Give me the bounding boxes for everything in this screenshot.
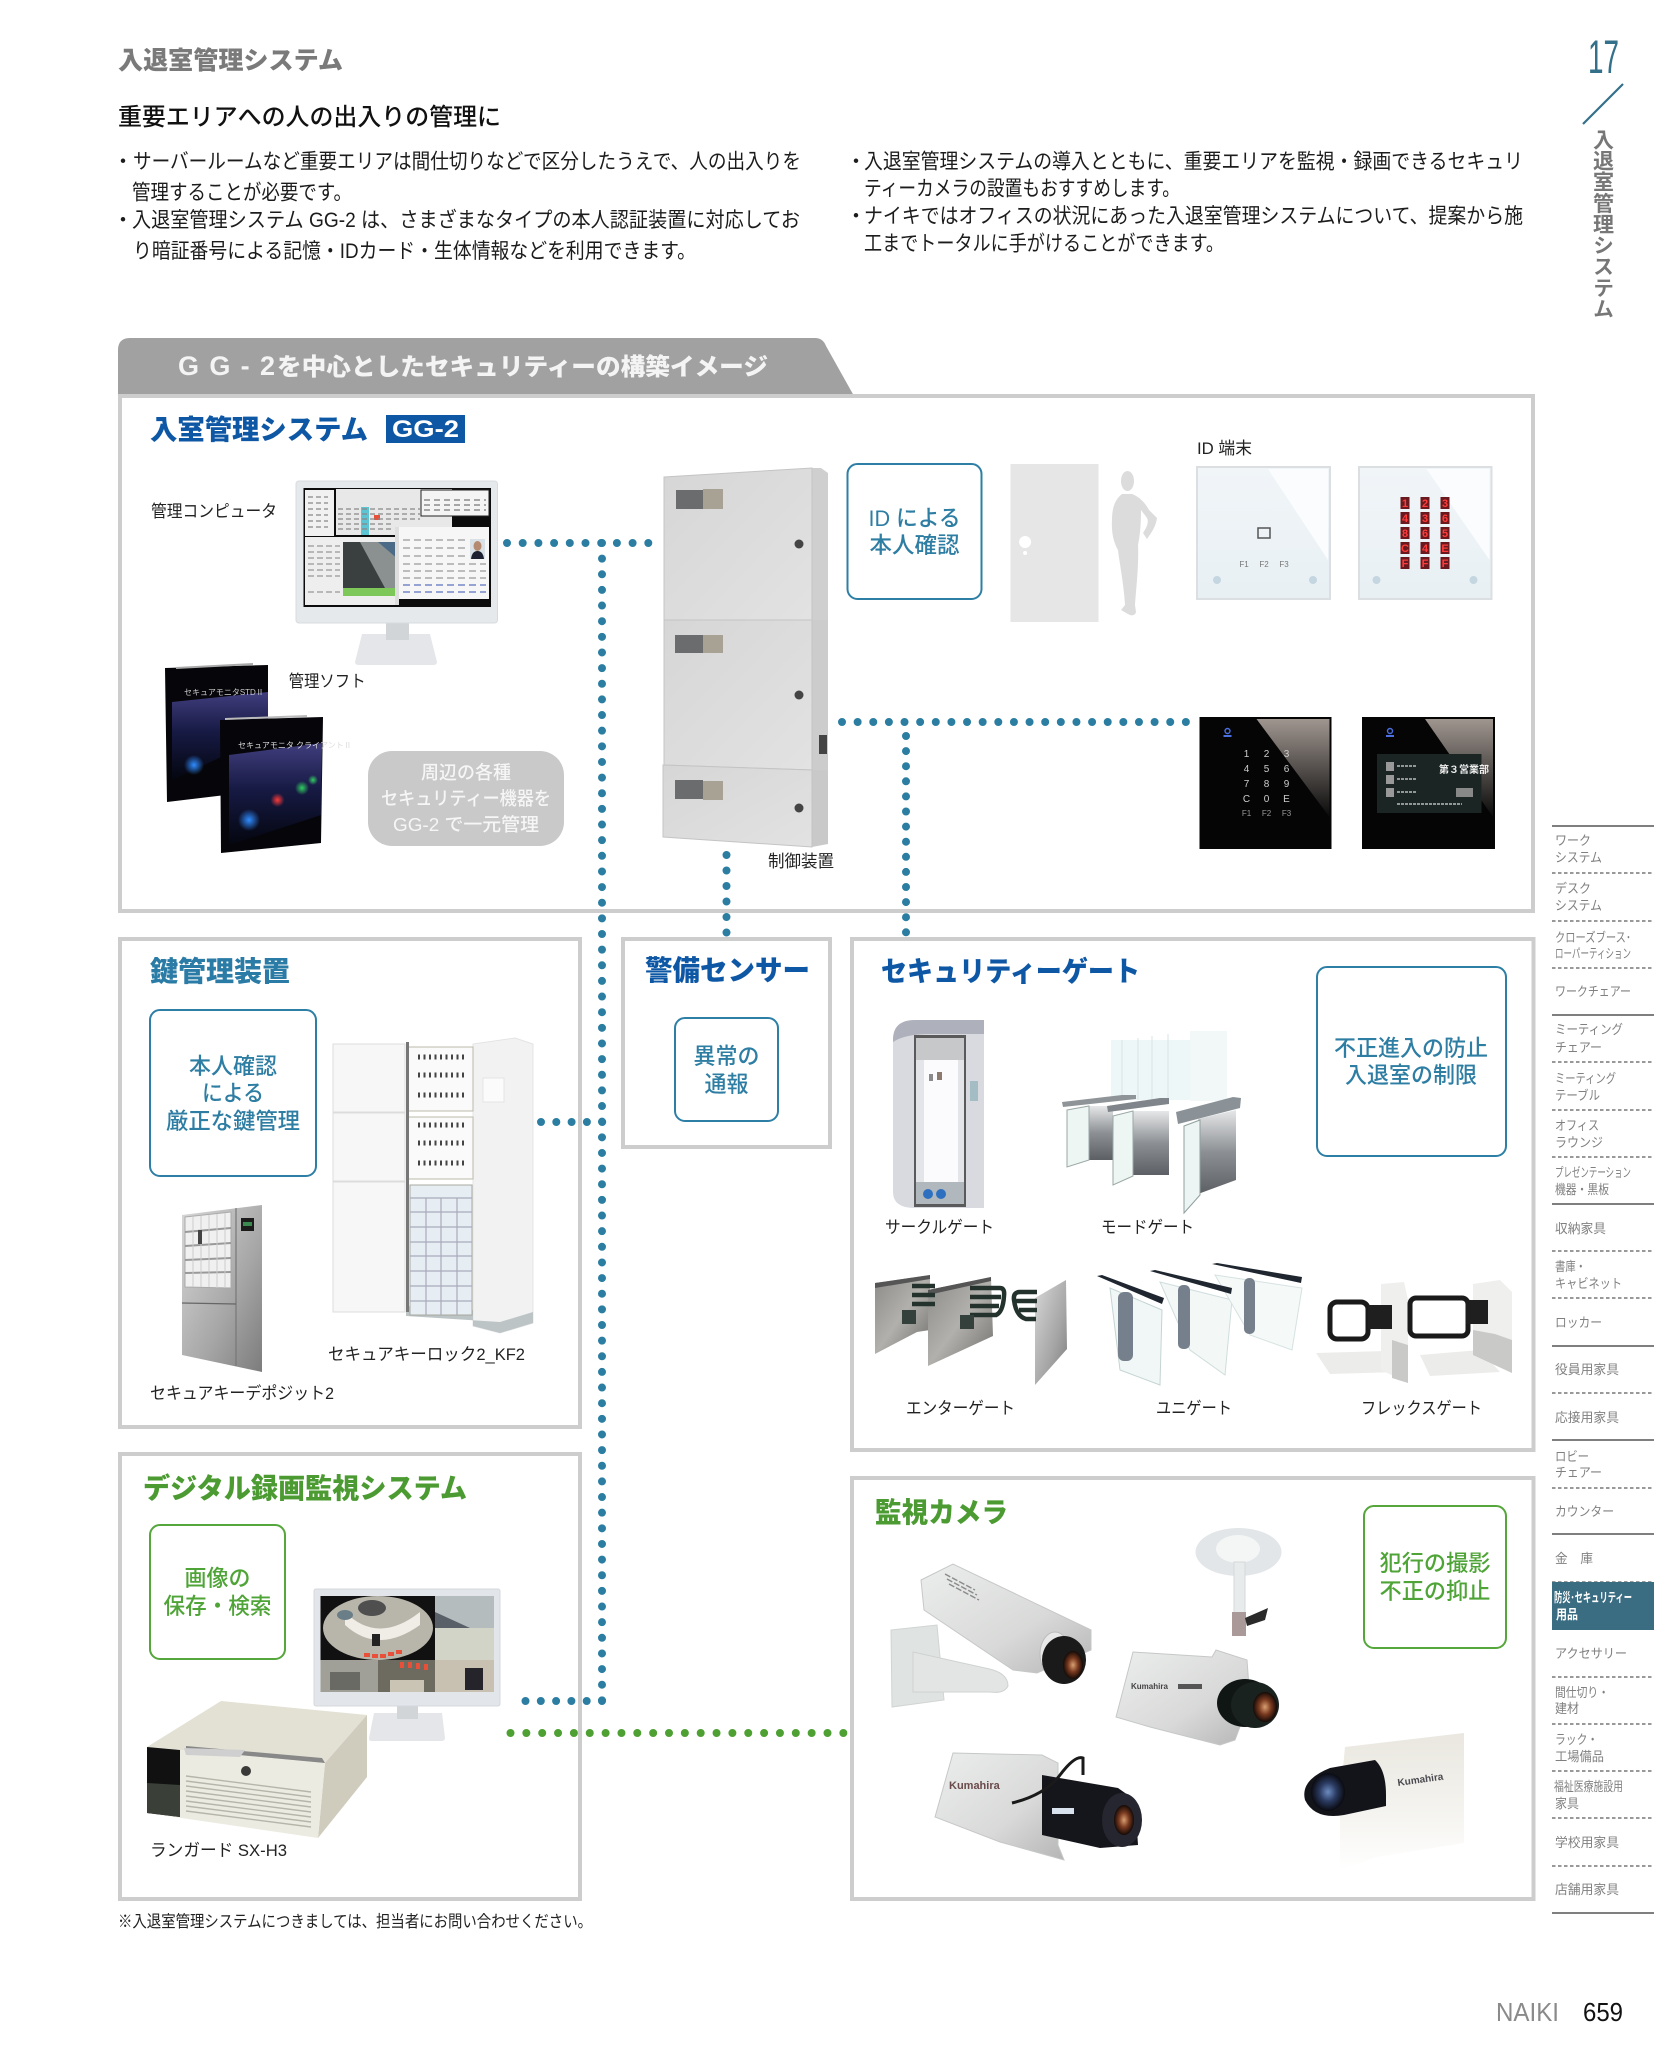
gray callout: unified management: GG-2 で一元管理 — [393, 814, 539, 835]
sidebar index: 金 庫 — [1555, 1551, 1593, 1566]
intro text left column: 入退室管理システム GG-2 は、さまざまなタイプの本人認証装置に対応してお — [132, 208, 800, 232]
sidebar index: ワークチェアー — [1555, 984, 1631, 999]
ID terminal black keypad — [1200, 717, 1332, 849]
intro text left column: 管理することが必要です。 — [132, 182, 352, 204]
ID terminal black keypad: 8 — [1264, 779, 1270, 790]
badge GG-2: GG-2 — [392, 416, 459, 443]
software boxes: セキュアモニタSTDⅡ — [184, 688, 264, 697]
sidebar index: 家具 — [1555, 1796, 1579, 1811]
uni gate — [1097, 1263, 1302, 1385]
heading: 警備センサー — [645, 955, 810, 986]
callout — [675, 1018, 778, 1121]
intro text right column: ・ — [846, 205, 866, 228]
ID terminal black display — [1362, 717, 1495, 849]
ID terminal white keypad: 3 — [1442, 498, 1448, 510]
callout: ID verification — [848, 464, 982, 599]
callout: 入退室の制限 — [1345, 1063, 1477, 1088]
ID terminal white keypad: 3 — [1422, 513, 1428, 525]
ID terminal black keypad: 3 — [1284, 749, 1290, 760]
sidebar index: 書庫・ — [1555, 1259, 1586, 1274]
camera 3: Kumahira — [949, 1780, 1001, 1792]
ID terminal black display: 第３営業部 — [1439, 763, 1489, 776]
heading: 鍵管理装置 — [150, 955, 290, 987]
heading: デジタル録画監視システム — [143, 1472, 467, 1504]
sidebar index: オフィス — [1555, 1118, 1599, 1133]
ID terminal white keypad: 6 — [1422, 528, 1428, 540]
label: サークルゲート — [885, 1218, 994, 1237]
sidebar index: ミーティング — [1555, 1071, 1616, 1086]
ID terminal black keypad: 7 — [1244, 779, 1250, 790]
sidebar index: チェアー — [1555, 1040, 1602, 1055]
camera 2 ceiling mount — [1116, 1528, 1282, 1745]
footnote: ※入退室管理システムにつきましては、担当者にお問い合わせください。 — [118, 1912, 592, 1931]
callout: 通報 — [704, 1072, 748, 1097]
intro text right column: ・ — [846, 150, 866, 174]
sidebar index: ミーティング — [1555, 1022, 1623, 1037]
sidebar index: 役員用家具 — [1555, 1362, 1619, 1377]
subtitle: 重要エリアへの人の出入りの管理に — [118, 104, 501, 131]
callout: 厳正な鍵管理 — [166, 1109, 300, 1134]
sidebar index: 学校用家具 — [1555, 1835, 1619, 1850]
label: フレックスゲート — [1361, 1399, 1482, 1418]
ID terminal white card reader: F2 — [1259, 560, 1269, 569]
panel: entry management system — [120, 396, 1533, 911]
ID terminal white keypad: E — [1441, 543, 1449, 555]
page number: 659 — [1583, 1997, 1623, 2027]
intro text right column: 工までトータルに手がけることができます。 — [864, 232, 1224, 256]
ID terminal white keypad: 6 — [1442, 513, 1448, 525]
circle gate — [893, 1020, 984, 1208]
gray callout: unified management — [368, 751, 564, 846]
key cabinet KF2 — [333, 1038, 533, 1333]
ID terminal white keypad: 2 — [1422, 498, 1428, 510]
connector dots: to security gates — [902, 736, 910, 933]
label: 制御装置 — [768, 852, 834, 871]
callout: 犯行の撮影 — [1380, 1551, 1490, 1576]
sidebar index: システム — [1555, 850, 1602, 865]
heading: セキュリティーゲート — [881, 955, 1140, 987]
callout: による — [202, 1081, 264, 1106]
label: ID 端末 — [1197, 439, 1252, 458]
ID terminal white card reader — [1197, 467, 1330, 599]
enter gate — [875, 1275, 1067, 1385]
intro text right column: ティーカメラの設置もおすすめします。 — [864, 178, 1180, 200]
ID terminal white keypad: F — [1422, 558, 1429, 570]
ID terminal white keypad: 8 — [1402, 528, 1408, 540]
chapter number 17 with slash: 17 — [1588, 30, 1619, 83]
key deposit — [182, 1205, 262, 1372]
camera 4: Kumahira — [1397, 1772, 1445, 1789]
sidebar index: 建材 — [1555, 1701, 1579, 1716]
ID terminal white card reader: F1 — [1239, 560, 1249, 569]
ID terminal white keypad: 1 — [1402, 498, 1408, 510]
sidebar index: アクセサリー — [1555, 1646, 1627, 1661]
sidebar index: 間仕切り・ — [1555, 1685, 1609, 1700]
mode gate — [1062, 1031, 1241, 1213]
gray callout: unified management: 周辺の各種 — [421, 762, 511, 783]
icon: person silhouette — [1112, 471, 1157, 615]
ID terminal black keypad: 5 — [1264, 764, 1270, 775]
connector dots: recorder to cameras — [510, 1729, 844, 1737]
label: エンターゲート — [906, 1399, 1015, 1418]
control unit cabinet — [663, 468, 828, 847]
label: セキュアキーロック2_KF2 — [328, 1345, 525, 1364]
callout — [150, 1525, 285, 1659]
sidebar index: システム — [1555, 898, 1602, 913]
camera 3 — [935, 1753, 1142, 1860]
sidebar index: デスク — [1555, 881, 1591, 896]
sidebar index: チェアー — [1555, 1465, 1602, 1480]
section tab: を中心としたセキュリティーの構築イメージ — [277, 353, 768, 381]
callout: 不正進入の防止 — [1334, 1036, 1488, 1061]
section tab: GG-2 — [178, 351, 275, 381]
callout — [1364, 1506, 1506, 1648]
label: 管理コンピュータ — [151, 502, 277, 521]
ID terminal black keypad: E — [1283, 794, 1290, 805]
ID terminal black keypad: 6 — [1284, 764, 1290, 775]
callout: 本人確認 — [189, 1054, 277, 1079]
intro text left column: サーバールームなど重要エリアは間仕切りなどで区分したうえで、人の出入りを — [133, 150, 801, 174]
camera 2 ceiling mount: Kumahira — [1131, 1682, 1168, 1691]
ID terminal black keypad: 2 — [1264, 749, 1270, 760]
ID terminal black keypad: 4 — [1244, 764, 1250, 775]
connector dots: to sensor — [722, 855, 730, 933]
flex gate — [1316, 1280, 1512, 1383]
sidebar index: キャビネット — [1555, 1276, 1622, 1291]
icon: door — [1010, 464, 1098, 622]
label: モードゲート — [1101, 1218, 1194, 1237]
recorder SX-H3 — [147, 1701, 367, 1838]
callout: ID verification: ID による — [868, 506, 960, 531]
recording monitor — [314, 1589, 500, 1741]
sidebar index: ロビー — [1555, 1449, 1589, 1464]
chapter number 17 with slash — [1583, 30, 1623, 124]
ID terminal black keypad: F1 — [1242, 809, 1252, 818]
sidebar index: テーブル — [1555, 1088, 1600, 1103]
panel: alarm sensor — [623, 939, 830, 1147]
intro text left column: ・ — [112, 209, 134, 232]
ID terminal black keypad: 1 — [1244, 749, 1250, 760]
active index item: 用品 — [1556, 1607, 1578, 1622]
callout — [1317, 967, 1506, 1156]
intro text right column: 入退室管理システムの導入とともに、重要エリアを監視・録画できるセキュリ — [864, 150, 1523, 174]
label: 管理ソフト — [289, 672, 366, 691]
active index item — [1552, 1582, 1654, 1630]
ID terminal black keypad: 9 — [1284, 779, 1290, 790]
sidebar index: 機器・黒板 — [1555, 1182, 1609, 1197]
callout: 不正の抑止 — [1380, 1579, 1490, 1604]
page title: 入退室管理システム — [118, 46, 343, 75]
intro text left column — [112, 150, 801, 263]
sidebar index: クローズブース･ — [1555, 930, 1631, 945]
panel: security gates — [852, 939, 1534, 1450]
connector dots: recorder monitor — [526, 1697, 602, 1705]
ID terminal white card reader: F3 — [1279, 560, 1289, 569]
intro text left column: ・ — [112, 150, 134, 174]
sidebar index: 工場備品 — [1555, 1749, 1604, 1764]
label: ランガード SX-H3 — [150, 1841, 287, 1860]
connector dots: key management — [541, 1118, 602, 1126]
ID terminal white keypad — [1359, 467, 1492, 599]
sidebar index: 店舗用家具 — [1555, 1882, 1619, 1897]
callout: 保存・検索 — [164, 1594, 272, 1619]
software boxes: セキュアモニタ クライアントⅡ — [238, 741, 352, 750]
panel: surveillance cameras — [852, 1478, 1534, 1899]
ID terminal white keypad: F — [1402, 558, 1409, 570]
callout: 画像の — [184, 1566, 250, 1591]
ID terminal black keypad: F2 — [1262, 809, 1272, 818]
label: ユニゲート — [1156, 1399, 1232, 1418]
camera 4 — [1304, 1733, 1464, 1870]
sidebar index — [1552, 826, 1654, 1913]
intro text right column: ナイキではオフィスの状況にあった入退室管理システムについて、提案から施 — [864, 205, 1523, 228]
ID terminal black keypad: F3 — [1282, 809, 1292, 818]
sidebar index: ロッカー — [1555, 1315, 1602, 1330]
intro text right column — [846, 150, 1523, 256]
sidebar index: カウンター — [1555, 1504, 1614, 1519]
sidebar index: 収納家具 — [1555, 1221, 1606, 1236]
intro text left column: り暗証番号による記憶・IDカード・生体情報などを利用できます。 — [133, 240, 696, 263]
connector dots: main vertical line — [598, 543, 606, 1701]
ID terminal white keypad: 4 — [1402, 513, 1409, 525]
sidebar index: ラウンジ — [1555, 1135, 1603, 1150]
callout: ID verification: 本人確認 — [870, 533, 960, 558]
panel: key management — [120, 939, 580, 1427]
sidebar index: 応接用家具 — [1555, 1410, 1619, 1425]
brand name: NAIKI — [1496, 1997, 1559, 2027]
ID terminal white keypad: 5 — [1442, 528, 1448, 540]
ID terminal black keypad: C — [1243, 794, 1250, 805]
callout — [150, 1010, 316, 1176]
connector dots: control unit to black terminals — [842, 718, 1186, 726]
ID terminal white keypad: C — [1401, 543, 1409, 555]
management monitor — [296, 481, 498, 665]
software boxes — [165, 663, 352, 853]
ID terminal black keypad: 0 — [1264, 794, 1270, 805]
ID terminal white keypad: 4 — [1422, 543, 1429, 555]
heading: 入室管理システム — [150, 414, 368, 445]
panel: digital recording system — [120, 1454, 580, 1899]
camera 1 wall mount — [891, 1564, 1091, 1707]
connector dots: control unit to monitor — [507, 539, 648, 547]
callout: 異常の — [694, 1044, 760, 1069]
gray callout: unified management: セキュリティー機器を — [381, 788, 551, 809]
vertical chapter title: 入退室管理システム — [1590, 129, 1614, 319]
sidebar index: ワーク — [1555, 833, 1591, 848]
label: セキュアキーデポジット2 — [150, 1383, 334, 1403]
heading: 監視カメラ — [875, 1497, 1008, 1528]
section tab — [118, 338, 854, 396]
ID terminal white keypad: F — [1442, 558, 1449, 570]
sidebar index: ラック・ — [1555, 1732, 1598, 1747]
sidebar index: 福祉医療施設用 — [1554, 1779, 1623, 1794]
